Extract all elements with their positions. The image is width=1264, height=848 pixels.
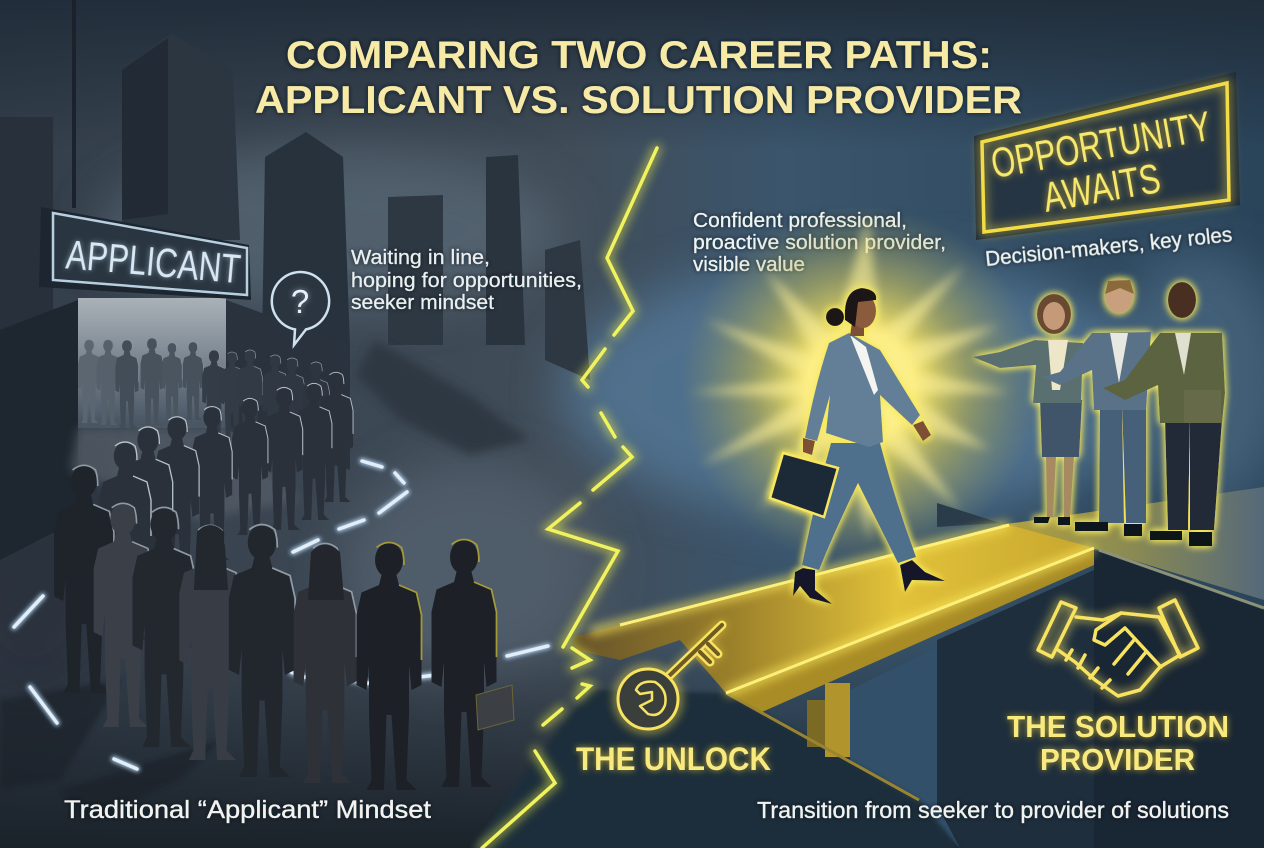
label: the solution provider <box>1007 709 1229 777</box>
title: APPLICANT VS. SOLUTION PROVIDER <box>255 79 1022 122</box>
hair bun <box>826 308 844 326</box>
lower cliffs <box>470 550 1264 848</box>
text: confident professional <box>693 210 946 276</box>
panel: applicant doorway <box>70 298 300 520</box>
icon: handshake <box>1038 600 1198 696</box>
text: decision-makers: Decision-makers, key roles <box>984 223 1233 271</box>
sign: Applicant: APPLICANT <box>64 231 243 292</box>
blazer <box>805 333 920 447</box>
dashed path on ground <box>14 461 548 769</box>
icon: key <box>618 625 722 729</box>
right platform <box>937 487 1264 608</box>
text: waiting in line: Waiting in line, <box>351 247 490 269</box>
label: the solution provider: THE SOLUTION <box>1007 709 1229 744</box>
caption: transition: Transition from seeker to provider of solutions <box>757 797 1229 823</box>
lightning divider <box>482 148 657 848</box>
professional woman walking <box>770 288 945 604</box>
city skyline silhouettes <box>0 0 590 560</box>
hands and neck <box>803 322 931 455</box>
text: confident professional: Confident professional, <box>693 210 907 232</box>
text: confident professional: visible value <box>693 254 805 276</box>
sign: Applicant <box>39 207 251 300</box>
title <box>255 34 1022 122</box>
bridge deck <box>573 525 1094 800</box>
sign: Opportunity Awaits <box>974 72 1240 240</box>
queue: far back row in doorway <box>78 338 330 465</box>
decision-makers group <box>973 279 1225 546</box>
text: confident professional: proactive solution provider, <box>693 232 946 254</box>
queue: front row of applicants <box>54 465 514 790</box>
man decision-maker centre <box>1042 279 1151 536</box>
icon: question speech bubble <box>272 272 329 345</box>
icon: question speech bubble: ? <box>291 283 309 320</box>
shirt <box>850 335 878 395</box>
queue: middle row of applicants <box>99 372 353 640</box>
sign: Opportunity Awaits: AWAITS <box>1039 154 1164 221</box>
label: the unlock: THE UNLOCK <box>576 741 771 777</box>
label: the solution provider: PROVIDER <box>1040 742 1195 777</box>
caption: traditional mindset: Traditional “Applicant” Mindset <box>64 796 431 824</box>
heels <box>793 560 945 604</box>
text: waiting in line: seeker mindset <box>351 292 494 314</box>
hair <box>845 288 876 327</box>
head <box>850 294 876 328</box>
title: COMPARING TWO CAREER PATHS: <box>286 34 992 77</box>
man decision-maker right <box>1103 282 1225 546</box>
briefcase <box>770 453 838 517</box>
woman decision-maker <box>973 294 1083 525</box>
trousers <box>802 443 916 570</box>
glow behind professional <box>680 205 1040 565</box>
text: waiting in line: hoping for opportunities, <box>351 270 582 292</box>
text: waiting in line <box>351 247 582 314</box>
